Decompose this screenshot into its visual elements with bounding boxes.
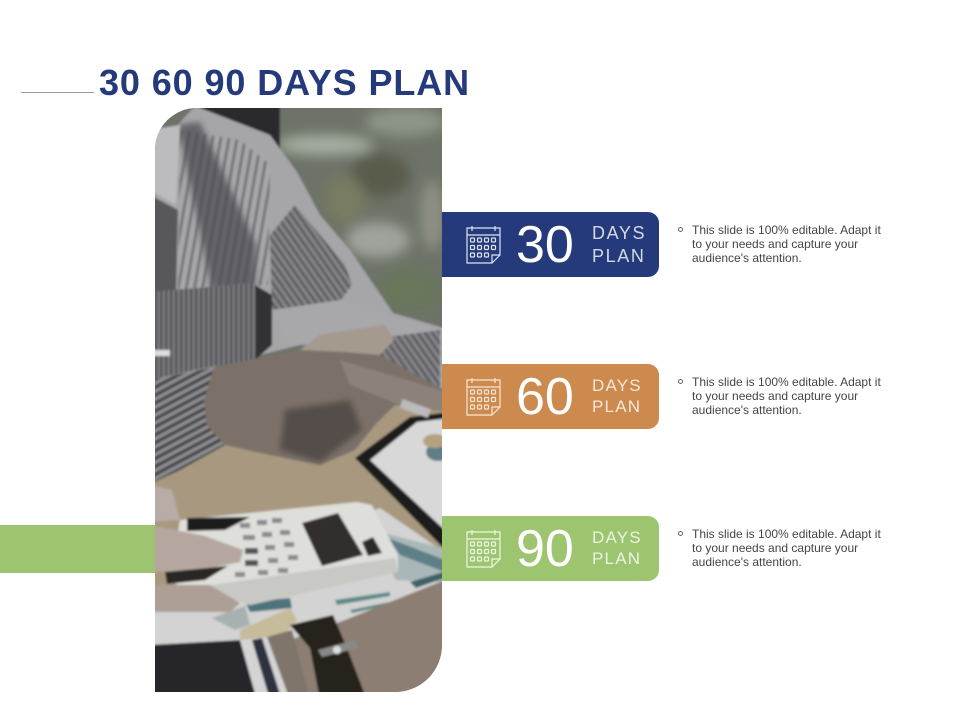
number: 30 <box>516 216 574 274</box>
card: 30 days plan <box>442 212 659 277</box>
left hand fingers <box>155 486 180 522</box>
label: PLAN <box>592 549 641 568</box>
card: 90 days plan <box>442 516 659 581</box>
icon: calendar <box>466 378 501 416</box>
text block: 60 days: to your needs and capture your <box>692 389 858 403</box>
text block: 60 days: audience's attention. <box>692 403 802 417</box>
text block: 30 days <box>678 223 881 265</box>
text block: 90 days: audience's attention. <box>692 555 802 569</box>
number: 90 <box>516 520 574 578</box>
blurred foliage <box>277 108 445 310</box>
label <box>592 376 642 416</box>
photo: business team with calculator <box>155 108 442 692</box>
text block: 30 days: This slide is 100% editable. Adapt it <box>692 223 881 237</box>
label: DAYS <box>592 223 646 243</box>
text block: 90 days <box>678 527 881 569</box>
text block: 30 days: audience's attention. <box>692 251 802 265</box>
bottom hand and wrist <box>293 580 442 692</box>
wristwatch <box>290 614 365 692</box>
label: DAYS <box>592 376 642 395</box>
paper <box>150 508 450 650</box>
green accent band <box>0 525 157 573</box>
text block: 60 days: This slide is 100% editable. Adapt it <box>692 375 881 389</box>
text block: 30 days: to your needs and capture your <box>692 237 858 251</box>
tablet <box>354 412 442 548</box>
hand pointing <box>203 350 442 466</box>
label <box>592 528 642 568</box>
text block: 90 days: This slide is 100% editable. Adapt it <box>692 527 881 541</box>
label: PLAN <box>592 397 641 416</box>
text block: 90 days: to your needs and capture your <box>692 541 858 555</box>
icon: calendar <box>466 226 501 264</box>
title rule <box>21 92 94 93</box>
shirt <box>150 106 450 400</box>
text block: 60 days <box>678 375 881 417</box>
title: 30 60 90 DAYS PLAN <box>99 62 470 103</box>
label: DAYS <box>592 528 642 547</box>
label <box>592 223 646 266</box>
number: 60 <box>516 368 574 426</box>
window frame <box>200 108 281 148</box>
calculator <box>170 502 398 605</box>
label: PLAN <box>592 246 645 266</box>
sleeve cuff <box>150 367 225 484</box>
card: 60 days plan <box>442 364 659 429</box>
icon: calendar <box>466 530 501 568</box>
